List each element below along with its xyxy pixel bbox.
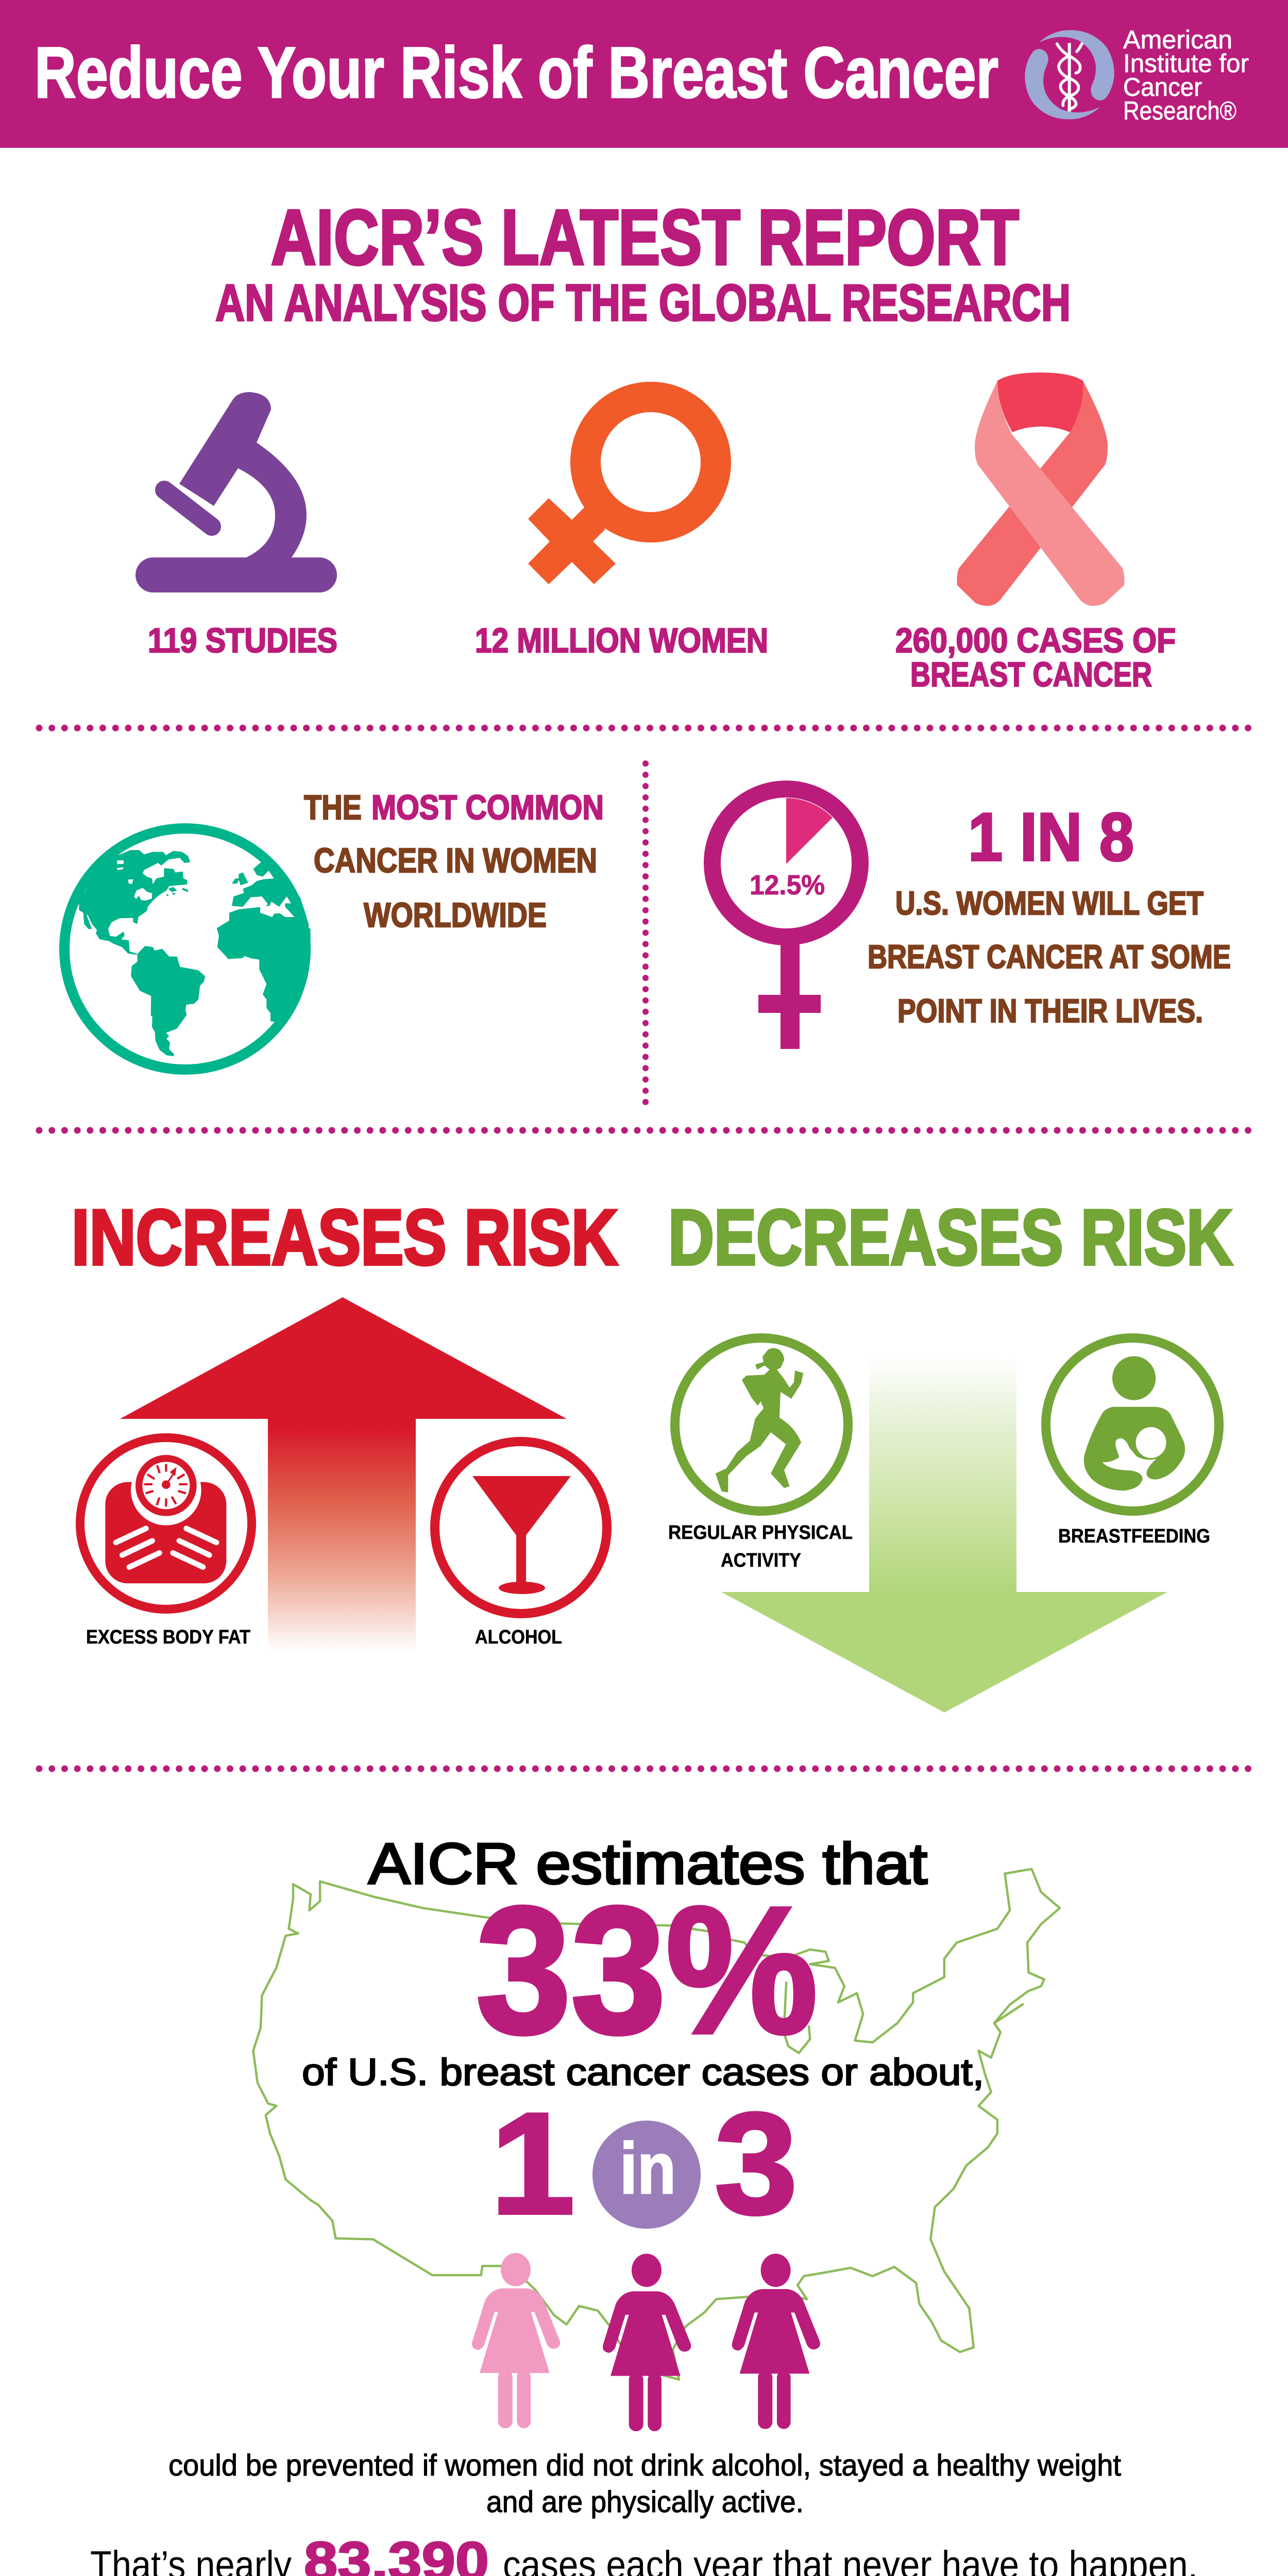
arrow: down bbox=[721, 1358, 1167, 1713]
big stat: 1 in 3: in bbox=[620, 2128, 676, 2209]
woman: magenta right bbox=[732, 2253, 820, 2429]
panel: most common cancer bbox=[64, 788, 604, 1070]
AICR logo: American bbox=[1123, 25, 1232, 54]
big stat: 1 in 8: 1 IN 8 bbox=[968, 799, 1134, 875]
text: most common cancer: THE bbox=[304, 788, 362, 827]
panel: report stats bbox=[135, 372, 1176, 694]
icon: female symbol bbox=[528, 397, 716, 584]
label: excess body fat: EXCESS BODY FAT bbox=[86, 1626, 250, 1648]
panel: decreases risk bbox=[668, 1194, 1232, 1713]
text: could be prevented bbox=[168, 2449, 1121, 2519]
page title: Reduce Your Risk of Breast Cancer bbox=[35, 32, 998, 113]
icon: runner bbox=[675, 1338, 848, 1511]
label: breastfeeding: BREASTFEEDING bbox=[1058, 1526, 1210, 1547]
panel: 1 in 8 bbox=[712, 789, 1231, 1049]
icon: globe bbox=[64, 828, 311, 1070]
text: most common cancer: MOST COMMON bbox=[371, 788, 604, 827]
icon: pink ribbon bbox=[957, 372, 1125, 606]
AICR logo: Institute for bbox=[1123, 49, 1249, 78]
stat label: studies: 119 STUDIES bbox=[148, 621, 337, 660]
text: U.S. women bbox=[868, 885, 1231, 1029]
icon: microscope bbox=[135, 392, 337, 592]
label: physical activity: REGULAR PHYSICAL bbox=[668, 1522, 853, 1544]
icon: scale bbox=[80, 1437, 251, 1609]
text: could be prevented: could be prevented if women did not drink alcohol, stayed a healthy weight bbox=[168, 2449, 1121, 2482]
big stat: 33%: 33% bbox=[476, 1870, 818, 2071]
stat label: cases: BREAST CANCER bbox=[910, 655, 1152, 694]
big stat: 1 in 3 bbox=[490, 2083, 798, 2244]
woman: magenta left bbox=[603, 2253, 691, 2431]
big stat: 1 in 3: 3 bbox=[715, 2083, 798, 2244]
text: most common cancer: CANCER IN WOMEN bbox=[314, 841, 597, 880]
map: United States outline bbox=[253, 1869, 1060, 2380]
heading: increases risk: INCREASES RISK bbox=[72, 1194, 618, 1281]
AICR logo bbox=[1025, 25, 1249, 125]
text: U.S. women: POINT IN THEIR LIVES. bbox=[897, 992, 1203, 1029]
report subheading: AN ANALYSIS OF THE GLOBAL RESEARCH bbox=[215, 274, 1071, 332]
label: physical activity bbox=[668, 1522, 853, 1571]
stat label: cases: 260,000 CASES OF bbox=[895, 621, 1176, 660]
AICR logo: Research® bbox=[1123, 96, 1236, 125]
label: physical activity: ACTIVITY bbox=[721, 1550, 801, 1571]
arrow: up bbox=[120, 1297, 567, 1652]
text: most common cancer bbox=[304, 788, 604, 935]
text: 83,390 cases bbox=[90, 2531, 1198, 2576]
text: of U.S. cases: of U.S. breast cancer cases or about, bbox=[302, 2052, 984, 2093]
report heading bbox=[215, 194, 1071, 332]
stat label: cases bbox=[895, 621, 1176, 694]
text: U.S. women: U.S. WOMEN WILL GET bbox=[895, 885, 1204, 922]
woman: pink bbox=[472, 2253, 560, 2428]
report heading: AICR’S LATEST REPORT bbox=[271, 194, 1019, 281]
icon: breastfeeding bbox=[1046, 1338, 1219, 1511]
header banner bbox=[0, 0, 1288, 148]
icon: female symbol with pie bbox=[712, 789, 860, 1049]
icon: three women bbox=[472, 2253, 820, 2431]
stat label: women: 12 MILLION WOMEN bbox=[475, 621, 768, 660]
big stat: 1 in 3: 1 bbox=[490, 2083, 575, 2244]
pie label: 12.5% bbox=[750, 870, 825, 901]
icon: alcohol glass bbox=[435, 1442, 607, 1614]
label: alcohol: ALCOHOL bbox=[475, 1626, 562, 1648]
text: most common cancer: WORLDWIDE bbox=[364, 896, 547, 935]
panel: 33 percent estimate bbox=[90, 1832, 1198, 2576]
AICR logo: Cancer bbox=[1123, 73, 1202, 101]
text: could be prevented: and are physically active. bbox=[486, 2485, 804, 2519]
text: AICR estimates: AICR estimates that bbox=[368, 1832, 927, 1896]
panel: increases risk bbox=[72, 1194, 618, 1652]
